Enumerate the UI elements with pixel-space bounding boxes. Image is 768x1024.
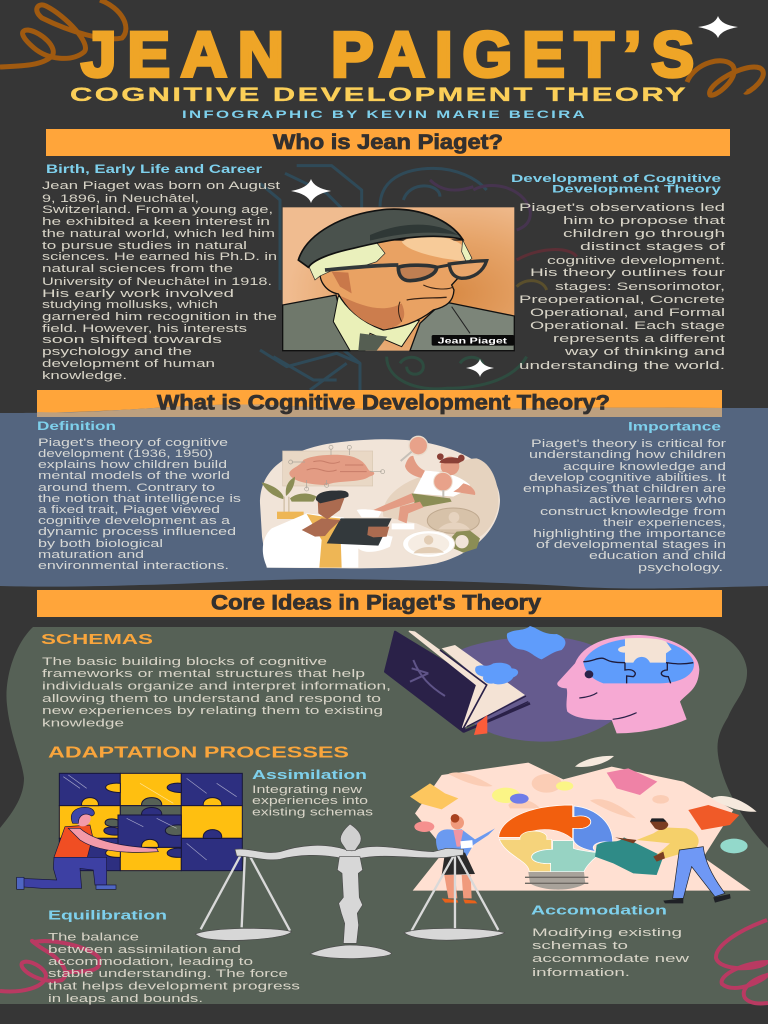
illustration: people assembling lightbulb puzzle xyxy=(410,756,757,903)
text block: birth, early life and career: natural sciences from the xyxy=(42,263,233,275)
text block: schemas xyxy=(41,632,391,730)
text block: development of cognitive development theory: Piaget's observations led xyxy=(519,202,725,214)
swirl: bottom left xyxy=(0,941,100,991)
title xyxy=(81,18,694,90)
text block: importance xyxy=(523,422,727,574)
text block: importance: develop cognitive abilities. It xyxy=(529,472,726,484)
text block: definition: environmental interactions. xyxy=(38,560,229,572)
text block: importance: highlighting the importance xyxy=(533,528,726,540)
text block: assimilation: existing schemas xyxy=(252,806,374,818)
illustration: doctor and child xyxy=(260,436,500,568)
text block: accomodation: Accomodation xyxy=(531,902,667,918)
text block: development of cognitive development theory: understanding the world. xyxy=(519,360,725,372)
text block: equilibration: stable understanding. The force xyxy=(48,968,288,980)
illustration: book and head with puzzle xyxy=(385,626,699,742)
text block: birth, early life and career: he exhibited a keen interest in xyxy=(42,216,270,228)
text block: development of cognitive development theory: him to propose that xyxy=(563,215,725,227)
text block: birth, early life and career: sciences. He earned his Ph.D. in xyxy=(42,251,277,263)
text block: birth, early life and career: the natural world, which led him xyxy=(42,228,275,240)
text block: definition: maturation and xyxy=(38,549,144,561)
text block: importance: their experiences, xyxy=(603,517,726,529)
text block: birth, early life and career: Jean Piaget was born on August xyxy=(42,180,280,192)
text block: birth, early life and career: soon shifted towards xyxy=(42,334,223,346)
heading banner: what is cognitive development theory (bar) xyxy=(37,390,722,417)
text block: birth, early life and career xyxy=(42,164,280,382)
text block: assimilation: Assimilation xyxy=(252,767,367,782)
text block: development of cognitive development theory: Operational. Each stage xyxy=(530,320,725,332)
icon: star below portrait xyxy=(466,359,494,377)
text block: birth, early life and career: field. However, his interests xyxy=(42,323,248,335)
byline: INFOGRAPHIC BY KEVIN MARIE BECIRA xyxy=(182,109,587,121)
panel: core ideas background xyxy=(0,627,768,1004)
text block: accomodation: schemas to xyxy=(532,940,628,952)
text block: schemas: individuals organize and interpret information, xyxy=(42,680,391,692)
text block: equilibration: in leaps and bounds. xyxy=(48,993,203,1005)
text block: importance: construct knowledge from xyxy=(540,506,726,518)
text block: development of cognitive development theory: stages: Sensorimotor, xyxy=(555,281,725,293)
text block: accomodation: Modifying existing xyxy=(532,927,682,939)
text block: importance: understanding how children xyxy=(529,449,726,461)
text block: importance: education and child xyxy=(589,550,726,562)
heading: what is cognitive development theory: What is Cognitive Development Theory? xyxy=(157,390,610,414)
text block: birth, early life and career: Switzerland. From a young age, xyxy=(42,204,273,216)
text block: equilibration: between assimilation and xyxy=(48,944,241,956)
text block: development of cognitive development theory: Preoperational, Concrete xyxy=(519,294,725,306)
text block: birth, early life and career: studying mollusks, which xyxy=(42,299,218,311)
text block: definition: around them. Contrary to xyxy=(38,482,215,494)
text block: schemas: SCHEMAS xyxy=(41,632,153,648)
heading banner: core ideas: Core Ideas in Piaget's Theory xyxy=(211,590,541,614)
text block: accomodation: information. xyxy=(532,967,630,979)
illustration: person assembling jigsaw xyxy=(17,773,242,889)
decorative circuit and brain background xyxy=(260,166,577,390)
text block: importance: Importance xyxy=(628,422,721,434)
text block: definition: development (1936, 1950) xyxy=(38,448,213,460)
text block: birth, early life and career: garnered him recognition in the xyxy=(42,311,277,323)
text block: definition xyxy=(37,421,241,572)
text block: definition: the notion that intelligence is xyxy=(38,493,241,505)
title: PAIGET’S xyxy=(331,18,694,90)
text block: definition: Piaget's theory of cognitive xyxy=(38,437,228,449)
text block: definition: by both biological xyxy=(38,538,163,550)
text block: importance: Piaget's theory is critical for xyxy=(531,438,727,450)
heading banner: who is jean piaget xyxy=(46,129,730,156)
text block: birth, early life and career: to pursue studies in natural xyxy=(42,240,247,252)
text block: birth, early life and career: His early work involved xyxy=(42,288,234,300)
text block: accomodation: accommodate new xyxy=(532,953,689,965)
text block: development of cognitive development theory: way of thinking and xyxy=(563,346,725,358)
text block: birth, early life and career: development of human xyxy=(42,358,215,370)
icon: star top right xyxy=(698,16,738,38)
portrait of jean piaget: Jean Piaget xyxy=(438,336,507,346)
text block: development of cognitive development theory: Operational, and Formal xyxy=(530,307,725,319)
text block: schemas: The basic building blocks of cognitive xyxy=(42,656,327,668)
text block: importance: psychology. xyxy=(638,562,723,574)
text block: birth, early life and career: 9, 1896, in Neuchâtel, xyxy=(42,193,199,205)
portrait of jean piaget xyxy=(283,207,514,351)
text block: definition: a fixed trait, Piaget viewed xyxy=(38,504,220,516)
text block: development of cognitive development theory: cognitive development. xyxy=(547,255,725,267)
text block: accomodation xyxy=(531,902,689,979)
text block: definition: dynamic process influenced xyxy=(38,526,236,538)
icon: star left of portrait xyxy=(291,179,331,203)
text block: assimilation xyxy=(252,767,374,818)
text block: schemas: allowing them to understand and respond to xyxy=(42,693,381,705)
text block: assimilation: experiences into xyxy=(252,795,368,807)
text block: equilibration xyxy=(48,908,301,1005)
text block: importance: of developmental stages in xyxy=(536,539,726,551)
text block: definition: explains how children build xyxy=(38,459,227,471)
text block: equilibration: accommodation, leading to xyxy=(48,956,253,968)
text block: importance: acquire knowledge and xyxy=(563,461,726,473)
text block: schemas: new experiences by relating them to existing xyxy=(42,705,383,717)
text block: definition: Definition xyxy=(37,421,116,433)
text block: development of cognitive development theory: Development Theory xyxy=(552,184,722,196)
heading: adaptation processes: ADAPTATION PROCESSES xyxy=(48,744,349,762)
text block: schemas: knowledge xyxy=(42,718,124,730)
title: JEAN xyxy=(81,18,284,90)
text block: definition: mental models of the world xyxy=(38,470,230,482)
text block: development of cognitive development theory: distinct stages of xyxy=(580,241,727,253)
illustration: balance scale xyxy=(195,824,505,959)
panel: definition and importance band xyxy=(0,404,768,589)
text block: equilibration: Equilibration xyxy=(48,908,167,922)
subtitle: COGNITIVE DEVELOPMENT THEORY xyxy=(70,85,688,106)
swirl: top right xyxy=(687,61,763,95)
swirl: bottom right xyxy=(716,920,768,1003)
heading banner overlap tint xyxy=(37,404,722,417)
text block: development of cognitive development theory xyxy=(511,173,727,372)
text block: development of cognitive development theory: represents a different xyxy=(553,333,725,345)
text block: equilibration: that helps development progress xyxy=(48,980,301,992)
heading banner: core ideas xyxy=(37,590,722,617)
text block: birth, early life and career: psychology and the xyxy=(42,346,192,358)
text block: development of cognitive development theory: children go through xyxy=(563,228,725,240)
text block: development of cognitive development theory: His theory outlines four xyxy=(530,267,726,279)
text block: birth, early life and career: University of Neuchâtel in 1918. xyxy=(42,276,272,288)
text block: birth, early life and career: Birth, Early Life and Career xyxy=(46,164,263,176)
text block: birth, early life and career: knowledge. xyxy=(42,370,127,382)
swirl: top left xyxy=(0,0,126,67)
text block: importance: emphasizes that children are xyxy=(523,483,726,495)
heading banner: who is jean piaget: Who is Jean Piaget? xyxy=(273,130,503,154)
text block: importance: active learners who xyxy=(589,494,726,506)
text block: definition: cognitive development as a xyxy=(38,515,230,527)
text block: development of cognitive development theory: Development of Cognitive xyxy=(511,173,721,185)
text block: schemas: frameworks or mental structures that help xyxy=(42,668,365,680)
text block: equilibration: The balance xyxy=(48,932,139,944)
text block: assimilation: Integrating new xyxy=(252,784,362,796)
